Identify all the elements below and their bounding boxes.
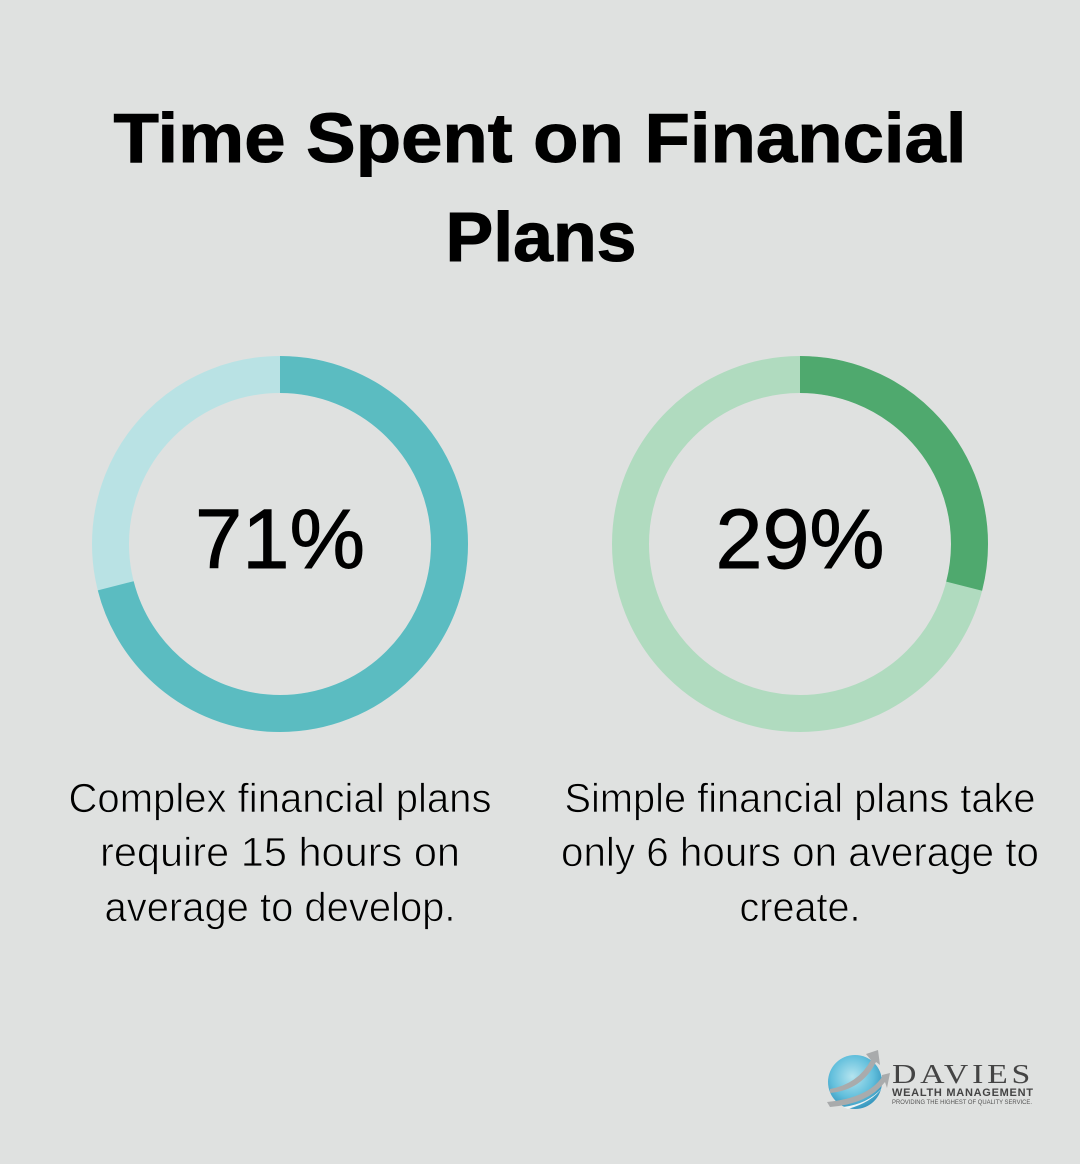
description: complex plans	[68, 775, 492, 930]
description: simple plans: only 6 hours on average to	[561, 829, 1039, 875]
value: 71%: 71%	[195, 492, 365, 586]
description: complex plans: Complex financial plans	[68, 775, 492, 821]
logo: Davies Wealth Management	[827, 1050, 1034, 1109]
description: complex plans: require 15 hours on	[100, 829, 460, 875]
wordmark: DAVIES	[892, 1059, 1034, 1089]
icon: globe with arrows	[827, 1050, 890, 1109]
donut chart: 71%	[110, 374, 450, 714]
description: simple plans: create.	[740, 884, 860, 930]
tagline: providing: PROVIDING THE HIGHEST OF QUALITY SERVICE.	[892, 1099, 1032, 1106]
description: simple plans: Simple financial plans take	[564, 775, 1036, 821]
title: Time Spent on Financial	[114, 99, 966, 177]
description: complex plans: average to develop.	[104, 884, 456, 930]
tagline: wealth management: WEALTH MANAGEMENT	[892, 1087, 1033, 1099]
panel: simple plans	[561, 374, 1039, 930]
value: 29%: 29%	[716, 492, 884, 586]
title: Plans	[446, 198, 636, 276]
panel: complex plans	[68, 374, 492, 930]
donut chart: 29%	[630, 374, 970, 714]
title	[114, 99, 966, 276]
description: simple plans	[561, 775, 1039, 930]
